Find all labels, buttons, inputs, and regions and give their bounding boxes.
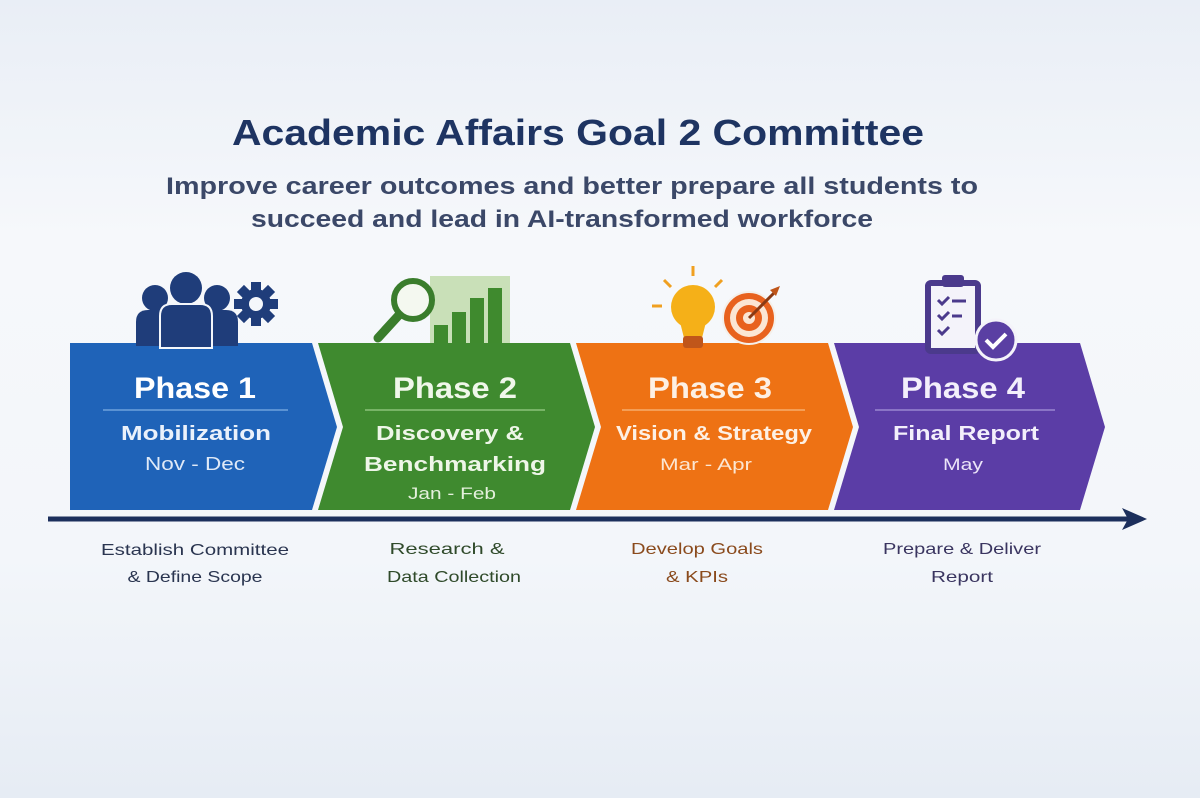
icon: people with gear [136, 272, 278, 348]
phase 4 chevron: Phase 4 [901, 372, 1025, 405]
text: phase descriptions: Report [931, 569, 994, 586]
phase 2 chevron: Jan - Feb [408, 484, 496, 503]
arrow: timeline [48, 508, 1147, 530]
text: phase descriptions: Research & [390, 541, 505, 558]
text: phase descriptions: & Define Scope [128, 569, 263, 586]
title: Academic Affairs Goal 2 Committee [232, 112, 924, 153]
phase 4 chevron [834, 343, 1105, 510]
phase 2 chevron: Discovery & [376, 423, 524, 445]
text: phase descriptions: Develop Goals [631, 541, 763, 558]
phase 4 chevron: Final Report [893, 423, 1039, 445]
text: phase descriptions: Data Collection [387, 569, 521, 586]
phase 3 chevron: Vision & Strategy [616, 423, 813, 445]
phase 3 chevron [576, 343, 853, 510]
phase 1 chevron: Nov - Dec [145, 454, 245, 474]
phase 2 chevron: Benchmarking [364, 454, 546, 476]
text: phase descriptions [101, 541, 1042, 586]
phase 1 chevron: Mobilization [121, 423, 271, 445]
subtitle: succeed and lead in AI-transformed workforce [251, 206, 873, 233]
text: phase descriptions: Establish Committee [101, 542, 289, 559]
phase 1 chevron [70, 343, 337, 510]
phase 3 chevron: Mar - Apr [660, 455, 752, 474]
phase 3 chevron: Phase 3 [648, 372, 772, 405]
subtitle: Improve career outcomes and better prepare all students to [166, 173, 978, 200]
icon: magnifier with bar chart [378, 276, 510, 343]
subtitle [166, 173, 978, 233]
phase 4 chevron: May [943, 455, 984, 474]
icon: lightbulb and target [652, 266, 780, 348]
text: phase descriptions: Prepare & Deliver [883, 541, 1042, 558]
text: phase descriptions: & KPIs [666, 569, 728, 586]
phase 2 chevron: Phase 2 [393, 372, 517, 405]
phase 1 chevron: Phase 1 [134, 372, 256, 405]
phase 2 chevron [318, 343, 595, 510]
icon: clipboard with check [928, 275, 1016, 360]
